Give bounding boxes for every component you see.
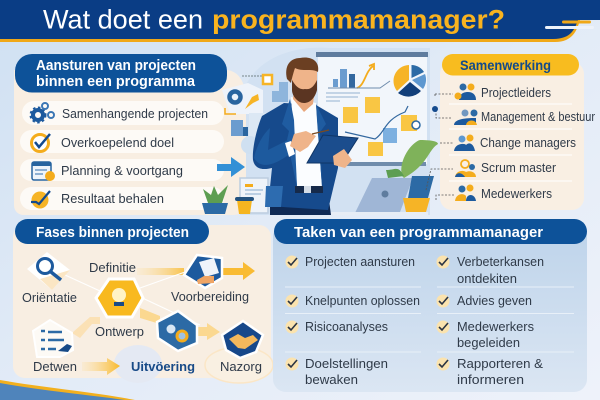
- phase: nazorg: [220, 321, 263, 374]
- task: doelstellingen: [286, 356, 388, 387]
- phase: uitvoering: [131, 311, 197, 374]
- bar chart: [333, 69, 355, 88]
- panel background: [14, 70, 246, 215]
- row: projectleiders: Projectleiders: [481, 86, 551, 100]
- task: doelstellingen: bewaken: [305, 372, 358, 387]
- shirt: [291, 97, 322, 187]
- phase: ontwerp: Ontwerp: [95, 325, 144, 339]
- row: projectleiders: [454, 84, 551, 100]
- phase: voorbereiding: [171, 255, 249, 304]
- row: samenhangende projecten: Samenhangende projecten: [62, 106, 208, 121]
- title: Wat doet een: [43, 4, 203, 34]
- trend arrow: [357, 64, 374, 88]
- holding hand: [333, 149, 352, 168]
- plant left: [202, 185, 228, 214]
- row: change managers: Change managers: [480, 136, 576, 150]
- document: [240, 178, 268, 213]
- row: planning: [20, 159, 224, 181]
- task: advies: Advies geven: [457, 293, 532, 308]
- row: change managers: [454, 134, 576, 151]
- sleeve: [254, 128, 292, 165]
- row: scrum master: Scrum master: [481, 161, 556, 175]
- panel heading: [15, 219, 209, 244]
- task: rapporteren: informeren: [457, 372, 524, 387]
- panel: taken: [273, 219, 587, 392]
- panel heading: Fases binnen projecten: [36, 225, 189, 241]
- task: verbeterkansen: Verbeterkansen: [457, 254, 544, 269]
- panel heading: [442, 54, 579, 76]
- panel heading: Samenwerking: [460, 57, 551, 73]
- row: medewerkers: Medewerkers: [481, 187, 552, 201]
- title banner: [0, 0, 600, 42]
- row: medewerkers: [455, 184, 552, 201]
- panel: fases: [13, 219, 273, 383]
- manager figure: [253, 58, 358, 215]
- face: [292, 66, 317, 103]
- lapels: [282, 99, 326, 187]
- phase: nazorg: Nazorg: [220, 360, 262, 374]
- task: medewerkers begeleiden: begeleiden: [457, 335, 520, 350]
- panel heading: binnen een programma: [36, 74, 196, 90]
- whiteboard chart: [316, 52, 428, 166]
- panel heading: [274, 219, 587, 244]
- beard: [292, 80, 317, 103]
- panel background: [13, 225, 271, 378]
- phase: orientatie: [22, 252, 77, 305]
- task: doelstellingen: Doelstellingen: [305, 356, 388, 371]
- task: verbeterkansen: ontdekiten: [457, 271, 517, 286]
- neck: [293, 88, 315, 112]
- panel background: [273, 224, 587, 392]
- row: scrum master: [455, 160, 556, 177]
- panel heading: Aansturen van projecten: [36, 58, 196, 74]
- row: overkoepelend doel: [20, 130, 224, 153]
- phase: ontwerp: [95, 279, 144, 339]
- arrow: planning to manager: [217, 157, 245, 177]
- cuff: [285, 141, 295, 157]
- task: medewerkers begeleiden: [436, 319, 534, 350]
- floating project icons: [222, 75, 288, 154]
- row: resultaat: [20, 187, 224, 210]
- phase: orientatie: Oriëntatie: [22, 291, 77, 305]
- laptop and desk: [318, 178, 428, 215]
- row: resultaat: Resultaat behalen: [61, 191, 164, 206]
- hand with pen: [290, 131, 316, 152]
- pocket: [265, 186, 283, 207]
- task: projecten aansturen: Projecten aansturen: [305, 254, 415, 269]
- phase: detwen: [33, 320, 77, 374]
- panel heading: Taken van een programmamanager: [294, 225, 543, 241]
- task: rapporteren: [436, 356, 543, 387]
- bottom-left wave: [0, 380, 135, 400]
- title highlight: programmamanager?: [212, 4, 505, 34]
- panel background: [440, 62, 584, 210]
- plant right: [386, 140, 438, 212]
- jacket: [253, 103, 338, 210]
- row: overkoepelend doel: Overkoepelend doel: [61, 135, 174, 150]
- pie chart: [393, 65, 426, 97]
- task: verbeterkansen: [436, 254, 544, 286]
- flow arrows: [65, 262, 255, 375]
- phase: definitie: Definitie: [89, 261, 136, 275]
- hair: [286, 58, 318, 83]
- phase: uitvoering: Uitvöering: [131, 359, 195, 374]
- illustration backdrop: [240, 48, 430, 215]
- panel heading: [15, 54, 227, 92]
- task: knelpunten: Knelpunten oplossen: [305, 293, 420, 308]
- panel: samenwerking: [426, 54, 595, 210]
- panel: aansturen: [14, 54, 246, 215]
- belt: [295, 186, 323, 193]
- phase: detwen: Detwen: [33, 360, 77, 374]
- task: medewerkers begeleiden: Medewerkers: [457, 319, 534, 334]
- tablet: [307, 135, 358, 163]
- row: planning: Planning & voortgang: [61, 163, 183, 178]
- phase: voorbereiding: Voorbereiding: [171, 290, 249, 304]
- task: risicoanalyses: Risicoanalyses: [305, 319, 388, 334]
- yellow cup: [235, 197, 254, 214]
- trousers: [270, 200, 331, 215]
- task: rapporteren: Rapporteren &: [457, 356, 543, 371]
- sticky notes: [343, 97, 417, 156]
- row: samenhangende projecten: [22, 101, 224, 125]
